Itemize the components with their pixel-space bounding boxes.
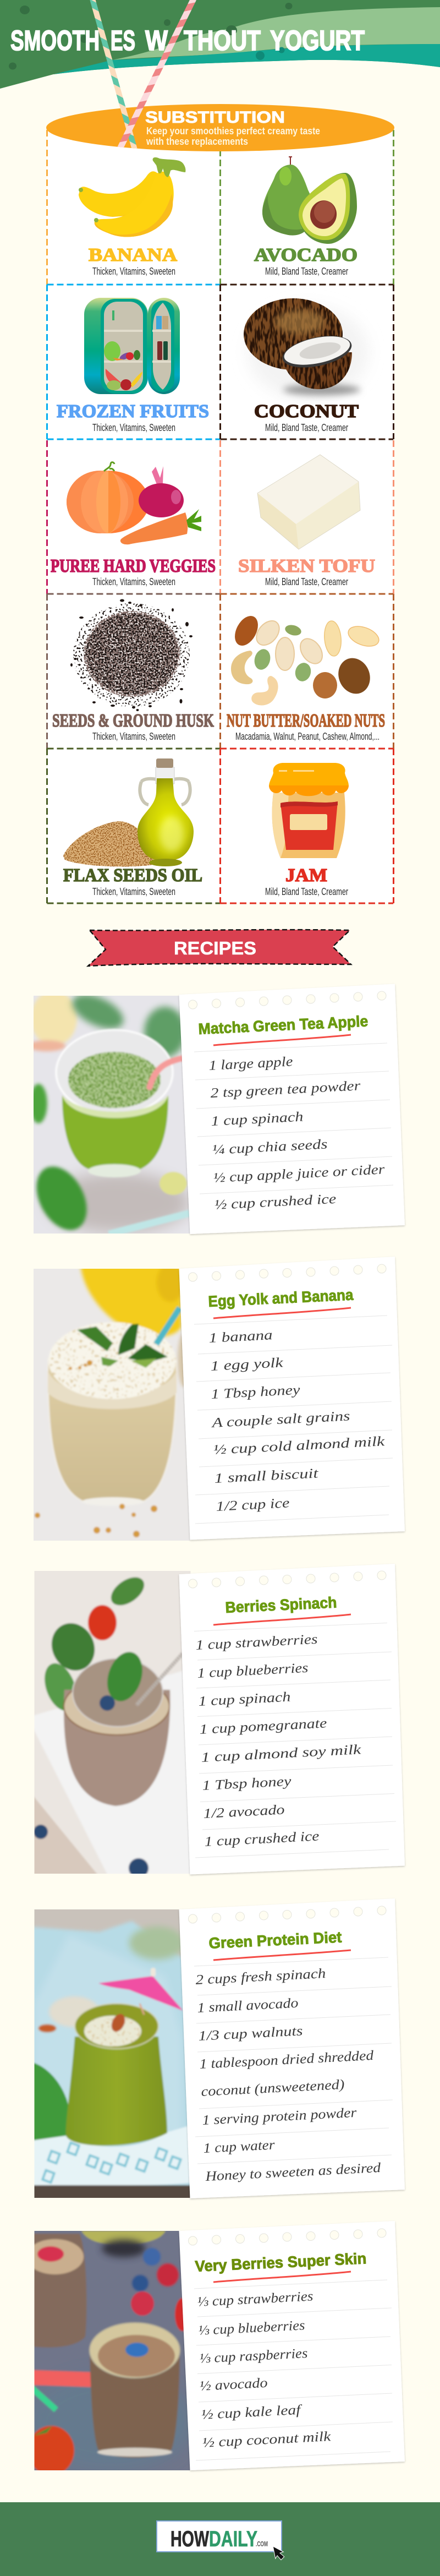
icon: cursor (273, 2547, 284, 2559)
ingredients list: 1 small avocado (197, 1996, 299, 2016)
note: frozen fruits: Thicken, Vitamins, Sweeten (92, 422, 175, 433)
ingredients list: ½ cup crushed ice (214, 1192, 337, 1213)
ingredients list: 1 cup spinach (198, 1690, 291, 1709)
ingredients list: ½ avocado (199, 2376, 268, 2394)
note paper (179, 2221, 405, 2470)
card: nut butter and soaked nuts (220, 594, 394, 749)
orange bowl ellipse with heading (46, 104, 394, 151)
recipe title: Egg Yolk and Banana (208, 1286, 354, 1310)
note: flax seeds oil: Thicken, Vitamins, Sweeten (92, 886, 175, 897)
name: flax seeds oil: FLAX SEEDS OIL (63, 865, 202, 886)
ingredients list (195, 1632, 362, 1849)
heading: recipes: RECIPES (174, 938, 256, 958)
icon: pumpkin, beet and carrot (67, 462, 201, 544)
icon: seeds (70, 599, 193, 711)
ingredients list: 1/2 avocado (203, 1803, 285, 1821)
card: silken tofu (220, 440, 394, 594)
straws (92, 0, 194, 150)
name: jam: JAM (285, 865, 327, 886)
note: banana: Thicken, Vitamins, Sweeten (92, 266, 175, 277)
ingredients list: 1 cup spinach (211, 1110, 304, 1129)
name: banana: BANANA (89, 245, 177, 265)
name: silken tofu: SILKEN TOFU (238, 556, 375, 576)
title: W (145, 25, 168, 56)
ingredients list: ½ cup kale leaf (201, 2403, 303, 2422)
ingredients list: ⅓ cup strawberries (197, 2289, 314, 2310)
name: puree hard veggies: PUREE HARD VEGGIES (51, 556, 216, 576)
ingredients list: 1 cup crushed ice (204, 1829, 320, 1849)
note: jam: Mild, Bland Taste, Creamer (265, 886, 348, 897)
subheading: Keep your smoothies perfect creamy taste (146, 125, 320, 137)
ingredients list: 1 banana (208, 1328, 273, 1346)
logo: howdaily.com: .COM (256, 2540, 268, 2548)
name: frozen fruits: FROZEN FRUITS (57, 401, 209, 422)
ingredients list: 1 Tbsp honey (202, 1774, 292, 1793)
note: puree hard veggies: Thicken, Vitamins, Sweeten (92, 576, 175, 587)
icon: jam jar (269, 763, 349, 858)
title (10, 25, 365, 56)
ingredients list: 1 Tbsp honey (211, 1383, 301, 1402)
logo: howdaily.com: DAILY (209, 2527, 257, 2551)
ingredients list: 1 cup strawberries (195, 1632, 318, 1653)
title: ES (111, 25, 135, 56)
photo: banana smoothie (28, 1263, 193, 1544)
note: avocado: Mild, Bland Taste, Creamer (265, 266, 348, 277)
note paper (179, 1898, 405, 2198)
photo: berry smoothie glasses (26, 2226, 193, 2475)
recipe 3: berries spinach (28, 1564, 405, 1880)
card: banana (47, 130, 185, 285)
punch holes (188, 2229, 386, 2245)
icon: fridge (84, 298, 180, 394)
icon: banana (79, 157, 185, 237)
ingredients list: 2 cups fresh spinach (195, 1966, 326, 1988)
ingredients list: 1 small biscuit (214, 1466, 319, 1486)
ingredients list: ½ cup apple juice or cider (213, 1162, 385, 1186)
ingredients list (195, 1966, 381, 2184)
footer (0, 2502, 440, 2576)
logo: howdaily.com (157, 2521, 284, 2559)
card: frozen fruits (47, 285, 220, 439)
ingredients list: ¼ cup chia seeds (212, 1137, 328, 1158)
ingredients list: ⅓ cup blueberries (198, 2318, 305, 2338)
ribbon: recipes (88, 930, 351, 966)
card: coconut (220, 285, 394, 439)
title: YOGURT (270, 25, 365, 56)
note: silken tofu: Mild, Bland Taste, Creamer (265, 576, 348, 587)
ingredients list: Honey to sweeten as desired (205, 2160, 381, 2184)
ingredients list: 1/3 cup walnuts (198, 2023, 303, 2044)
icon: tofu (257, 455, 360, 549)
logo: howdaily.com: HOW (170, 2527, 209, 2551)
title: THOUT (184, 25, 261, 56)
note: seeds and ground husk: Thicken, Vitamins, Sweeten (92, 731, 175, 742)
ingredients list (208, 1054, 385, 1213)
card: jam (220, 749, 394, 903)
card: puree hard veggies (47, 440, 216, 594)
heading: substitution: SUBSTITUTION (145, 108, 285, 127)
ingredients list: 1 cup pomegranate (199, 1716, 327, 1737)
ingredients list: 1 egg yolk (210, 1355, 284, 1374)
note paper (179, 984, 405, 1234)
icon: avocado (262, 157, 357, 244)
icon: nuts (230, 612, 382, 706)
punch holes (188, 1906, 386, 1923)
photo: green smoothie (34, 996, 190, 1234)
recipe title: Matcha Green Tea Apple (198, 1012, 369, 1038)
ingredients list: 1 cup water (203, 2137, 275, 2156)
ingredients list: 1/2 cup ice (216, 1496, 290, 1514)
ingredients list: ½ cup coconut milk (202, 2429, 332, 2451)
ingredients list (197, 2289, 332, 2451)
punch holes (188, 1264, 386, 1281)
photo: berry spinach smoothie (28, 1566, 193, 1880)
recipe 5: very berries super skin (26, 2221, 405, 2475)
recipe 4: green protein diet (28, 1898, 405, 2202)
subheading: with these replacements (146, 136, 248, 147)
punch holes (188, 991, 386, 1009)
recipe title: Very Berries Super Skin (195, 2250, 367, 2275)
card: avocado (220, 130, 394, 285)
icon: coconut (244, 298, 369, 399)
name: coconut: COCONUT (254, 401, 359, 422)
ingredients list: 1 cup blueberries (197, 1661, 309, 1681)
ingredients list: 1 large apple (208, 1054, 293, 1073)
ingredients list: ⅓ cup raspberries (199, 2346, 308, 2366)
substitution grid background (47, 128, 394, 903)
recipe title: Berries Spinach (225, 1593, 337, 1616)
ingredients list: 1 tablespoon dried shredded (199, 2048, 374, 2072)
ingredients list: 1 serving protein powder (202, 2105, 357, 2128)
icon: flax seeds oil bottle (63, 758, 194, 866)
ingredients list: coconut (unsweetened) (201, 2077, 345, 2099)
name: avocado: AVOCADO (254, 245, 358, 265)
title: SMOOTH (10, 25, 100, 56)
ingredients list: ½ cup cold almond milk (213, 1434, 386, 1458)
recipe 2: egg yolk and banana (28, 1257, 405, 1544)
punch holes (188, 1571, 386, 1588)
ingredients list: 2 tsp green tea powder (210, 1078, 361, 1101)
note paper (179, 1257, 405, 1540)
ingredients list: A couple salt grains (210, 1409, 350, 1431)
card: flax seeds oil (47, 749, 220, 903)
card: seeds and ground husk (47, 594, 220, 749)
recipe title: Green Protein Diet (208, 1929, 342, 1952)
ingredients list (208, 1328, 386, 1514)
note: coconut: Mild, Bland Taste, Creamer (265, 422, 348, 433)
name: seeds and ground husk: SEEDS & GROUND HUSK (52, 711, 214, 731)
ingredients list: 1 cup almond soy milk (201, 1742, 362, 1765)
header wave banner (0, 0, 440, 89)
photo: green protein smoothie (28, 1904, 193, 2202)
note paper (179, 1564, 405, 1875)
recipe 1: matcha green tea apple (26, 984, 405, 1239)
